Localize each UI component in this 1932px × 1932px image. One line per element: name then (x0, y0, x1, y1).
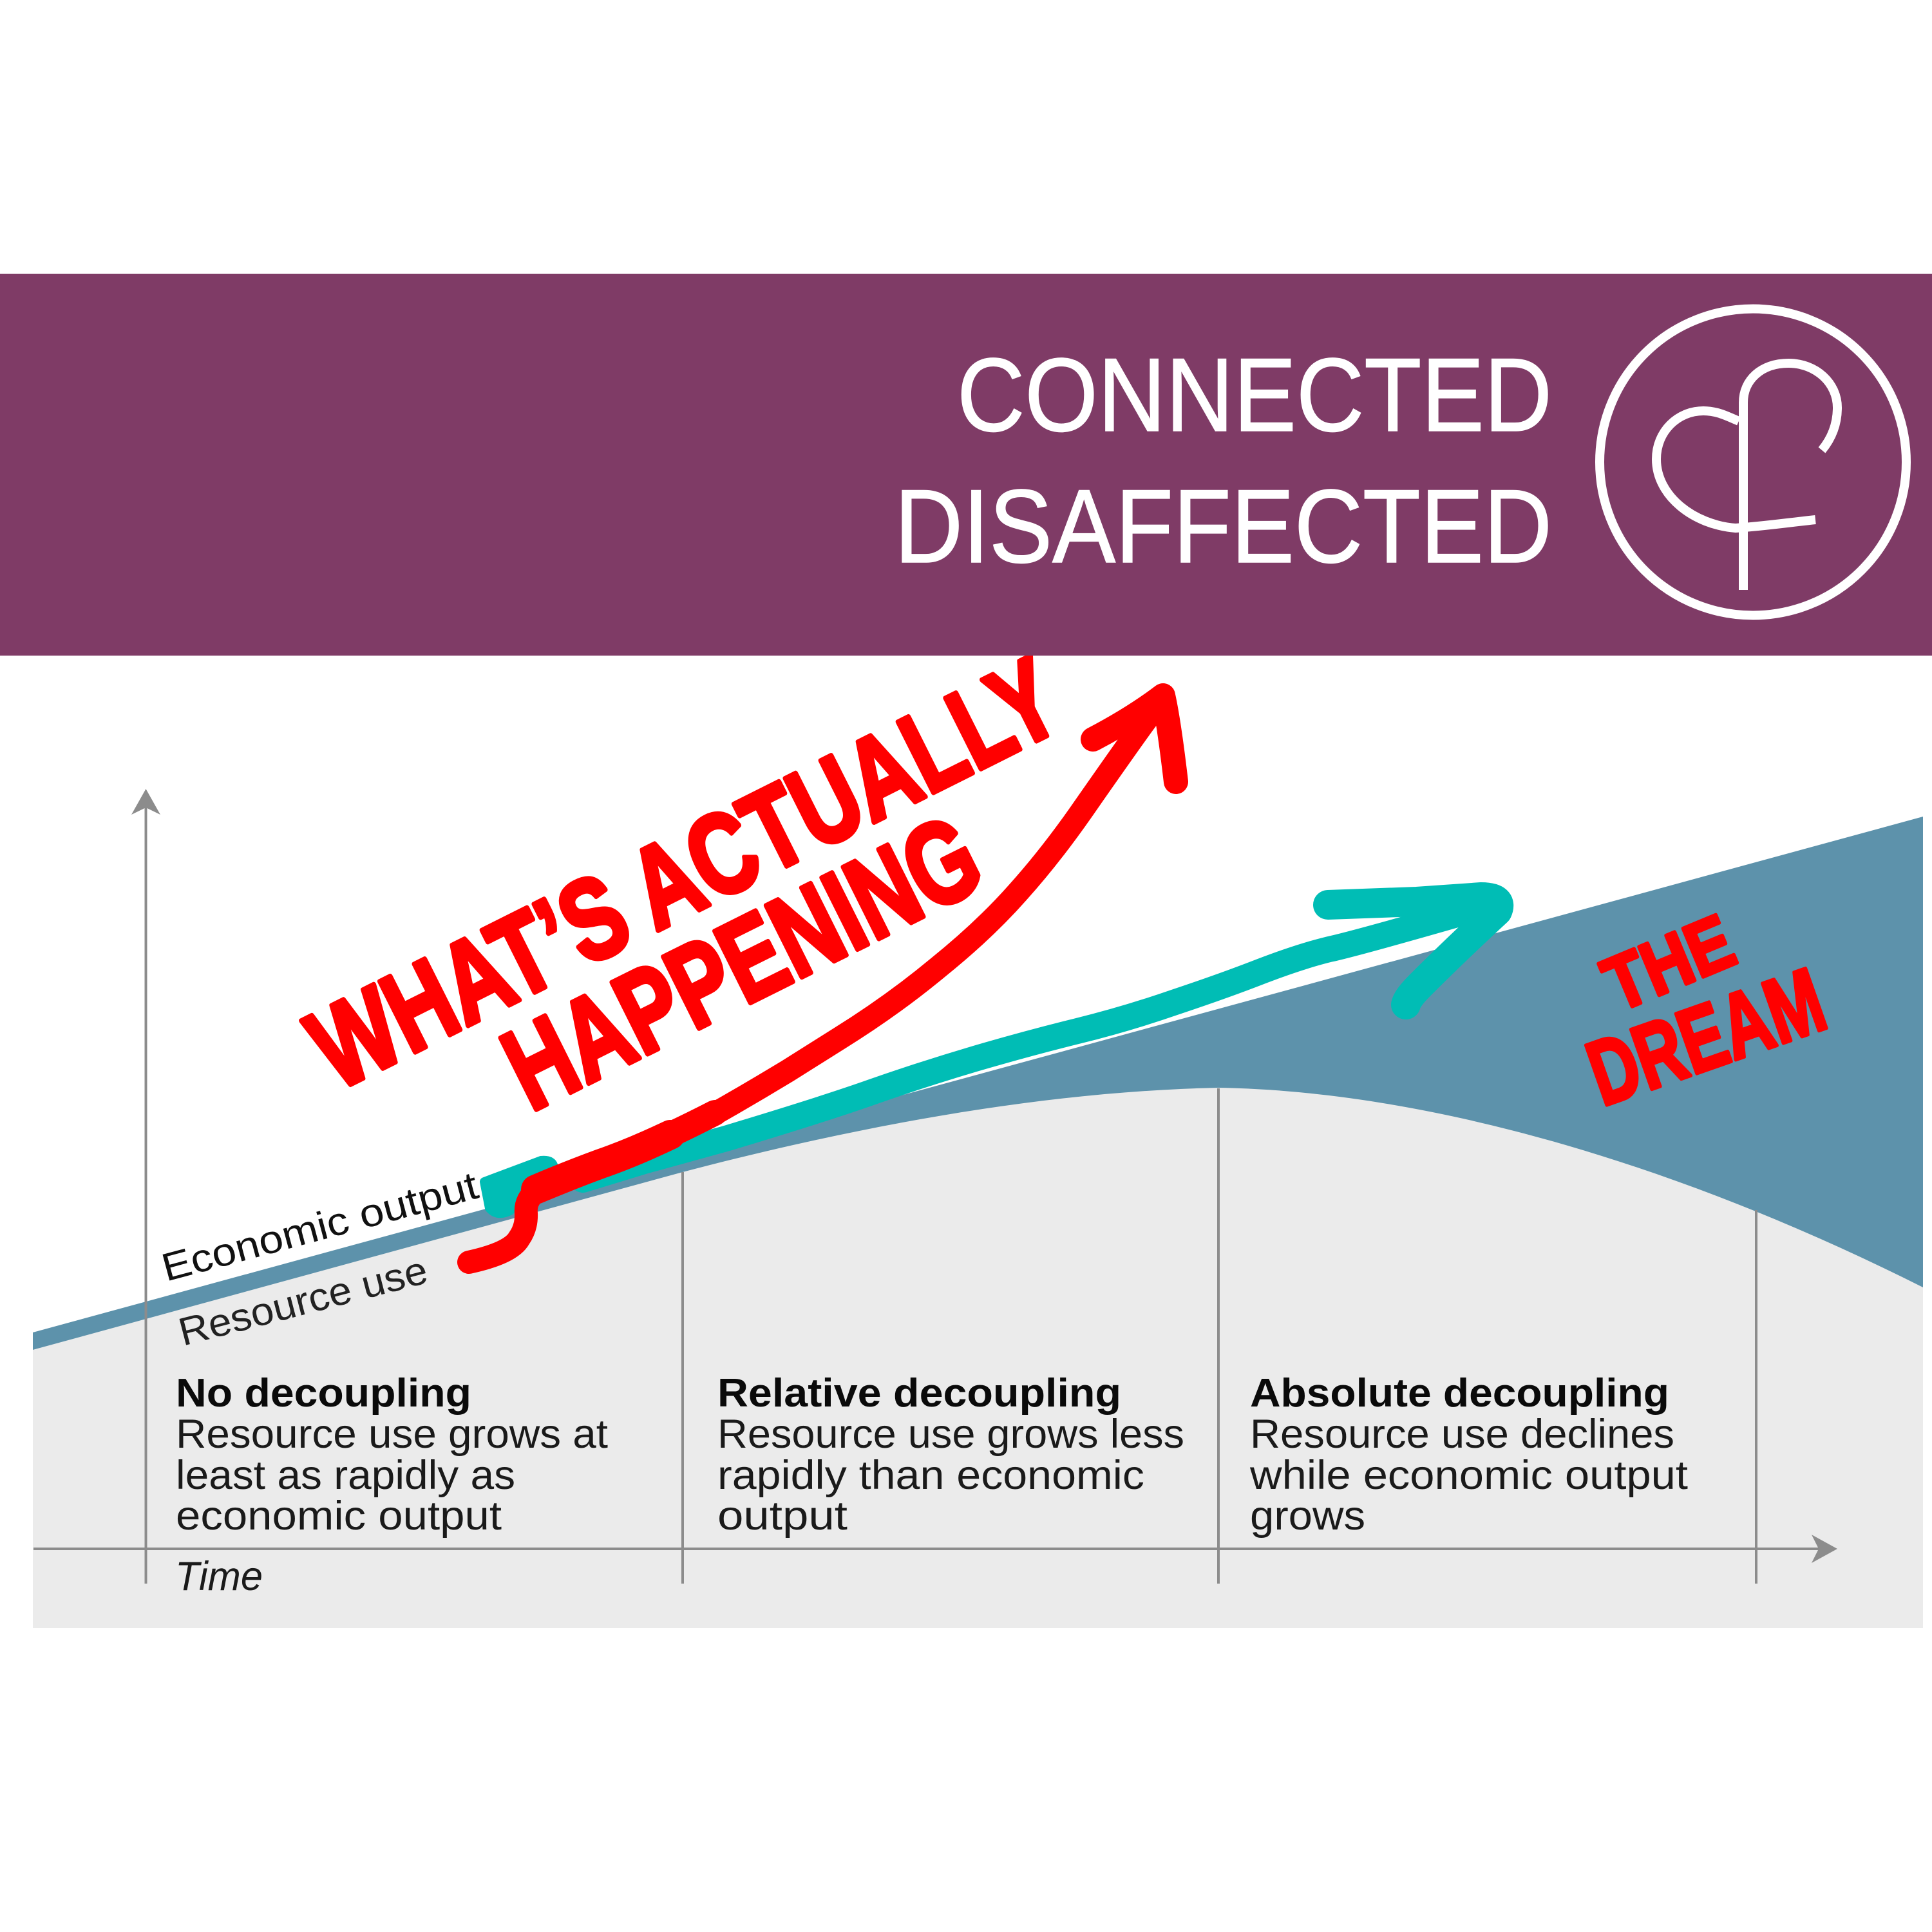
headline: what's actually happening: HAPPENING (484, 790, 1000, 1135)
logo: circle with heart monogram (1600, 309, 1906, 616)
column: no decoupling (176, 1371, 609, 1539)
header band (0, 274, 1932, 656)
column: absolute decoupling: Resource use declines (1250, 1412, 1674, 1457)
headline: the dream: DREAM (1575, 949, 1837, 1125)
header title: CONNECTED (957, 337, 1552, 453)
label: economic output: Economic output (157, 1163, 482, 1290)
column: relative decoupling: rapidly than economic (717, 1453, 1144, 1498)
y axis with arrow (131, 789, 160, 1584)
label: time: Time (175, 1554, 263, 1599)
column: relative decoupling (717, 1371, 1184, 1539)
headline: what's actually happening: WHAT’S ACTUALLY (290, 632, 1079, 1113)
column: relative decoupling: output (717, 1493, 848, 1539)
x axis with arrow (33, 1535, 1837, 1563)
label: resource use: Resource use (174, 1248, 432, 1354)
column: no decoupling: economic output (176, 1493, 502, 1539)
red hand-drawn arrow (469, 696, 1176, 1262)
header title: DISAFFECTED (895, 468, 1552, 585)
headline: the dream: THE (1591, 898, 1746, 1028)
column: no decoupling: least as rapidly as (176, 1453, 515, 1498)
column: relative decoupling: Resource use grows less (717, 1412, 1184, 1457)
column: absolute decoupling: grows (1250, 1493, 1365, 1539)
column: absolute decoupling: while economic output (1249, 1453, 1689, 1498)
column: absolute decoupling (1249, 1371, 1689, 1539)
area: gap between economic output and resource use (33, 817, 1923, 1352)
column: relative decoupling: Relative decoupling (717, 1371, 1121, 1416)
teal hand-drawn arrow (484, 897, 1499, 1213)
column: no decoupling: No decoupling (176, 1371, 471, 1416)
headline: what's actually happening (290, 632, 1079, 1135)
area: resource use under the curve (33, 1088, 1923, 1628)
column: absolute decoupling: Absolute decoupling (1250, 1371, 1669, 1416)
phase dividers (683, 1088, 1756, 1584)
header title (895, 337, 1552, 585)
column: no decoupling: Resource use grows at (176, 1412, 609, 1457)
